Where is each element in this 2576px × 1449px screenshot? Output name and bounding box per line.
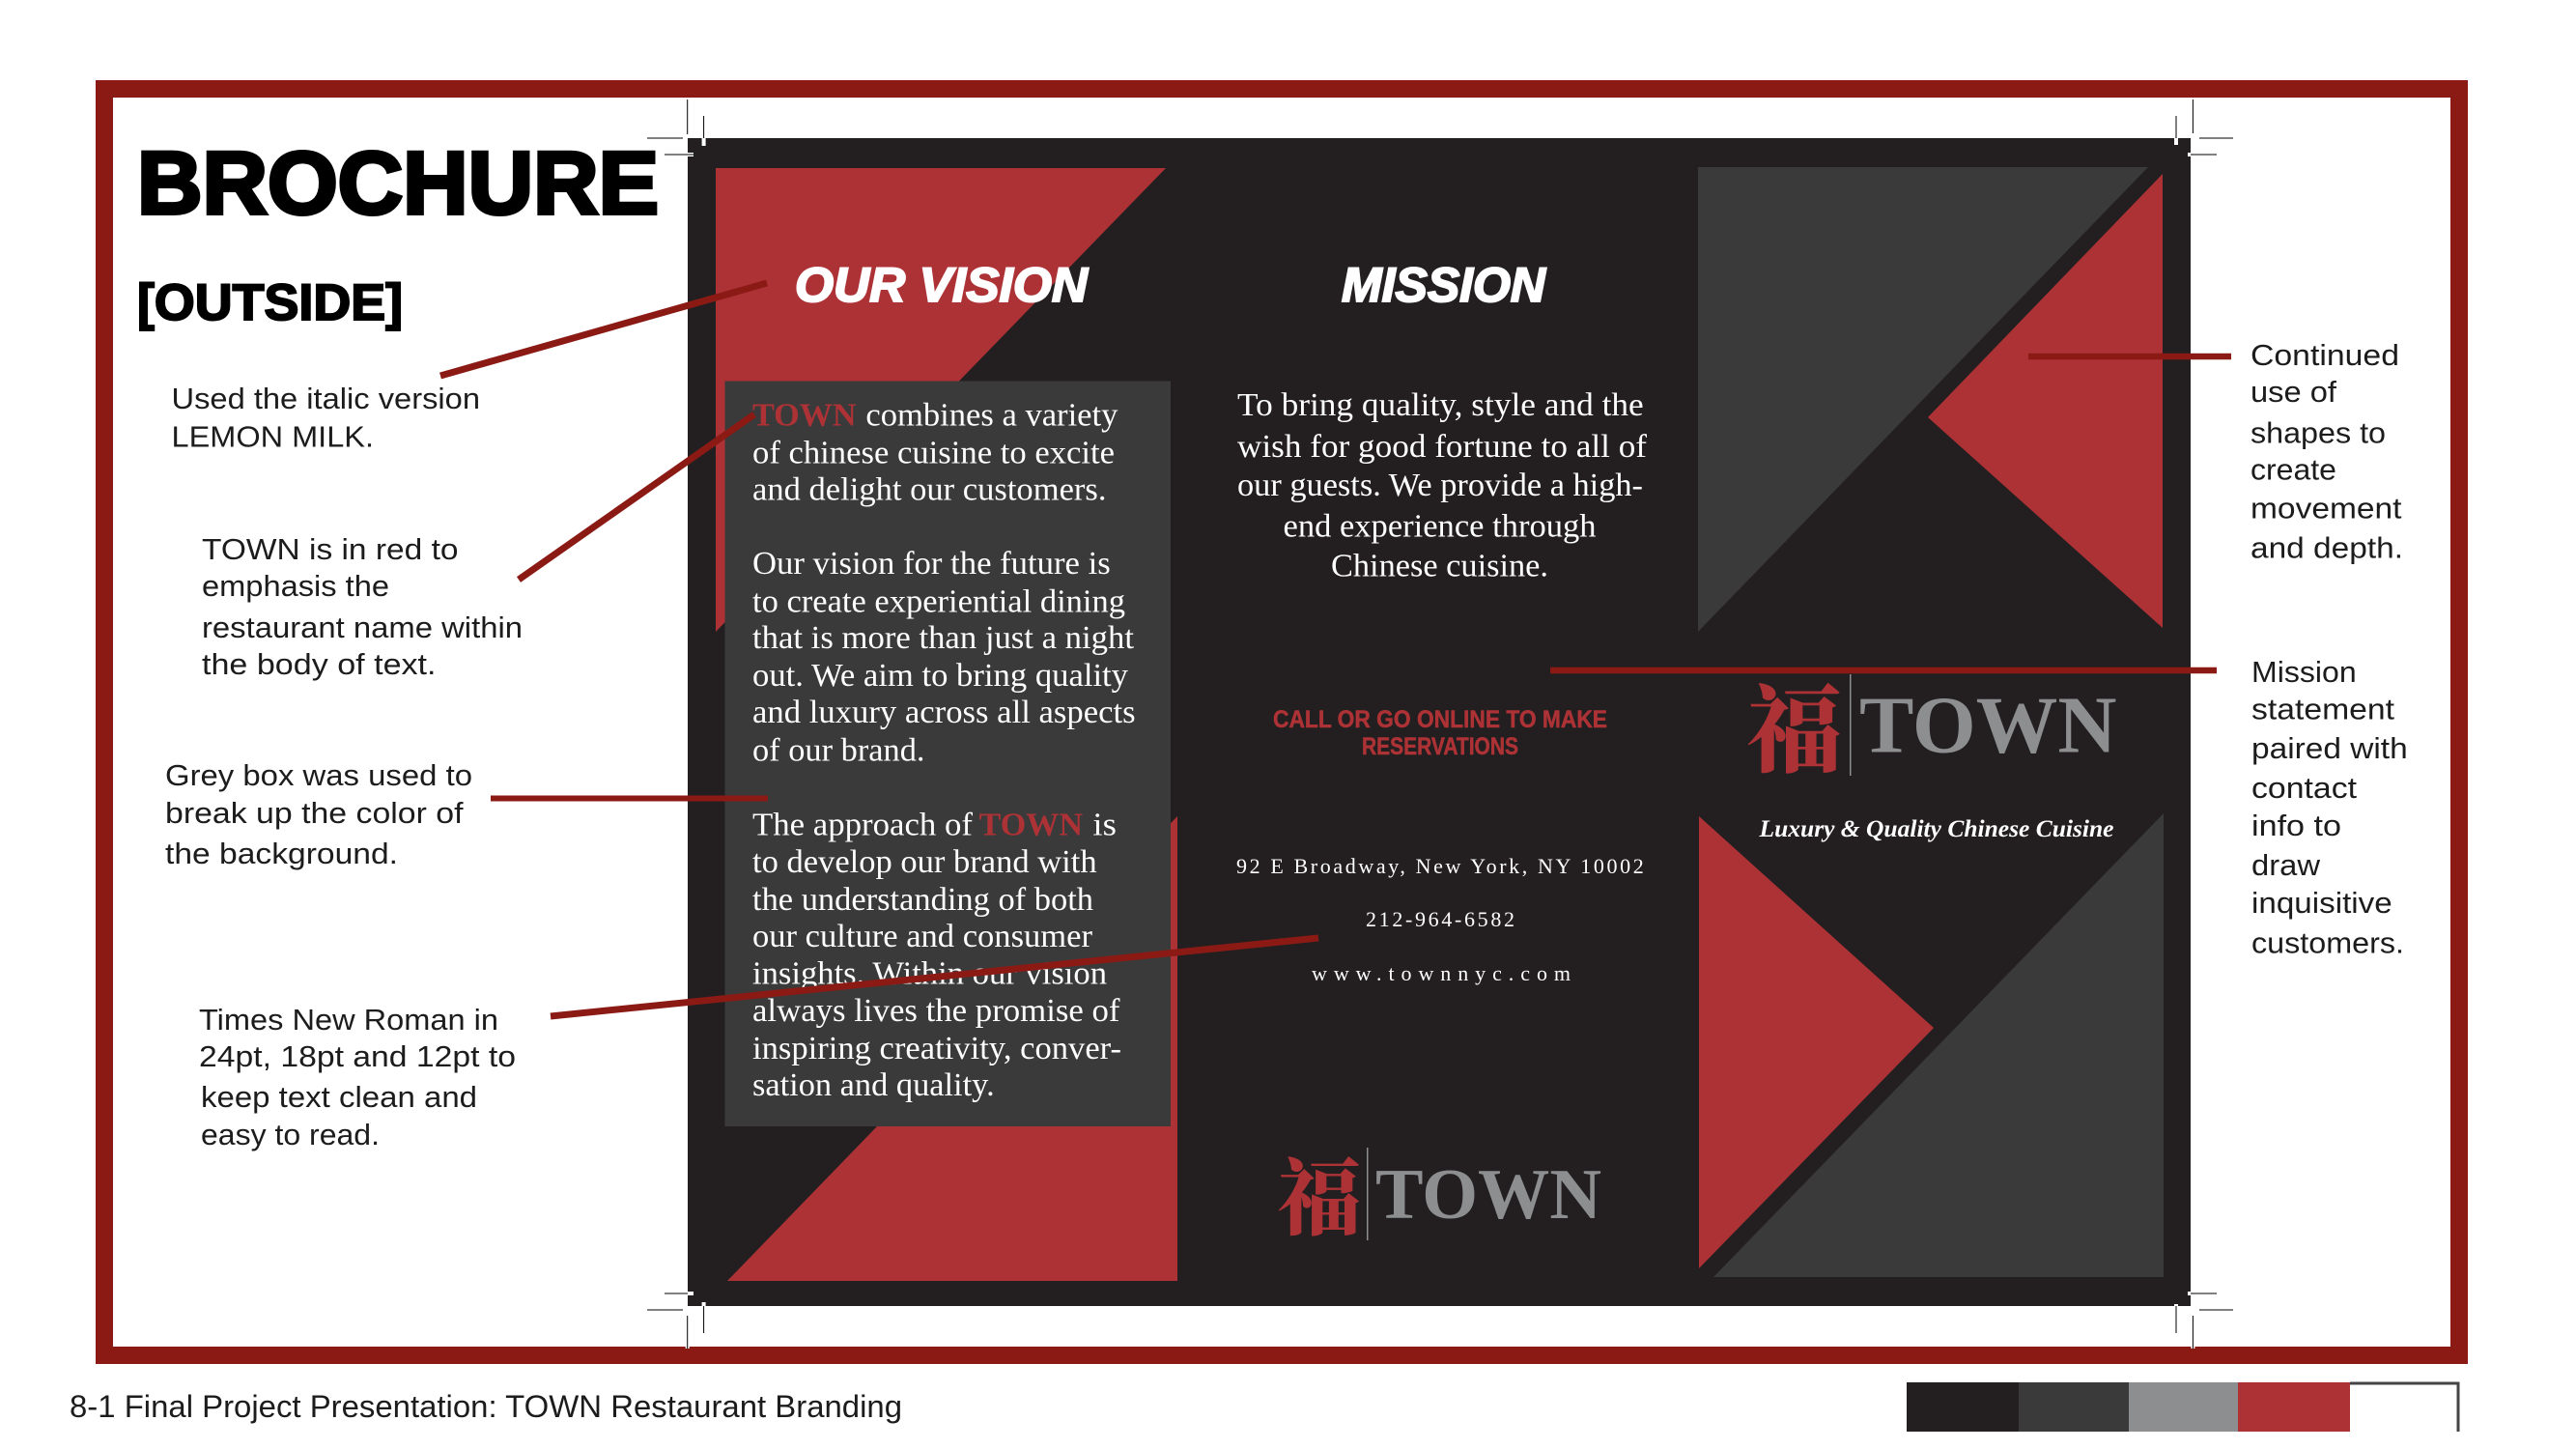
annotation: grey box: Grey box was used to (165, 758, 472, 792)
mission body text (1237, 387, 1648, 583)
annotation: mission (2251, 655, 2408, 960)
vision body text: TOWN (979, 808, 1083, 843)
annotation: TOWN in red: emphasis the (202, 569, 389, 603)
vision body text: insights. Within our vision (752, 956, 1107, 992)
brochure background (688, 138, 2191, 1306)
annotation: mission: paired with (2251, 731, 2408, 765)
annotation: shapes: use of (2250, 375, 2336, 409)
vision body text: and luxury across all aspects (752, 695, 1136, 730)
annotation: mission: draw (2251, 848, 2321, 882)
callout line: mission (1550, 668, 2217, 673)
annotation: shapes (2250, 338, 2403, 565)
logo: cover: 福 (1747, 681, 1842, 785)
vision body text: that is more than just a night (752, 620, 1135, 656)
annotation: typeface (199, 1003, 516, 1151)
annotation: mission: customers. (2251, 926, 2404, 960)
subtitle: [OUTSIDE] (137, 274, 403, 331)
annotation: italic font: LEMON MILK. (172, 419, 374, 454)
footer: 8-1 Final Project Presentation: TOWN Restaurant Branding (70, 1389, 902, 1424)
annotation: TOWN in red: restaurant name within (202, 611, 523, 644)
panel: cover top shapes (1698, 167, 2163, 632)
callout line: grey box (491, 796, 768, 802)
vision body text: out. We aim to bring quality (752, 658, 1128, 694)
callout line: TOWN in red (519, 414, 754, 580)
vision body text: to develop our brand with (752, 844, 1097, 880)
annotation: shapes: movement (2250, 492, 2402, 526)
mission body text: end experience through (1283, 508, 1596, 544)
vision body text: combines a variety (865, 398, 1118, 434)
logo: middle panel: TOWN (1375, 1155, 1601, 1235)
annotation: TOWN in red: TOWN is in red to (202, 532, 458, 566)
annotation: italic font (172, 382, 480, 454)
heading: mission: MISSION (1342, 258, 1546, 312)
vision body text: is (1092, 808, 1117, 843)
heading: our vision: OUR VISION (795, 258, 1089, 312)
logo: middle panel: 福 (1278, 1153, 1361, 1246)
vision body text (752, 398, 1136, 1103)
annotation: grey box (165, 758, 472, 870)
vision body text: sation and quality. (752, 1067, 995, 1103)
callout line: shapes (2028, 354, 2231, 359)
mission body text: our guests. We provide a high- (1237, 468, 1643, 503)
vision body text: of chinese cuisine to excite (752, 435, 1115, 471)
cover tagline: Luxury & Quality Chinese Cuisine (1758, 816, 2113, 842)
vision body text: of our brand. (752, 732, 925, 769)
mission body text: To bring quality, style and the (1237, 387, 1644, 423)
annotation: shapes: Continued (2250, 338, 2399, 372)
annotation: italic font: Used the italic version (172, 382, 480, 415)
annotation: grey box: break up the color of (165, 796, 464, 830)
annotation: mission: contact (2251, 771, 2357, 805)
colour palette (1907, 1382, 2458, 1432)
logo: cover: TOWN (1859, 681, 2117, 771)
vision body text: to create experiential dining (752, 583, 1125, 620)
annotation: shapes: shapes to (2250, 415, 2386, 450)
annotation: typeface: Times New Roman in (199, 1003, 498, 1037)
annotation: typeface: keep text clean and (201, 1080, 477, 1114)
vision body text: The approach of (752, 808, 974, 843)
crop marks (647, 99, 2233, 1349)
annotation: typeface: 24pt, 18pt and 12pt to (199, 1039, 516, 1073)
annotation: TOWN in red (202, 532, 523, 681)
annotation: grey box: the background. (165, 837, 398, 870)
callout line: italic font (440, 283, 767, 376)
annotation: mission: Mission (2251, 655, 2357, 689)
vision body text: and delight our customers. (752, 471, 1107, 507)
contact details: www.townnyc.com (1312, 961, 1571, 985)
title: BROCHURE (137, 134, 659, 233)
vision body text: inspiring creativity, conver- (752, 1031, 1121, 1066)
logo: middle panel (1278, 1148, 1601, 1246)
contact details (1236, 854, 1644, 985)
annotation: shapes: and depth. (2250, 531, 2403, 565)
logo: cover (1747, 674, 2117, 785)
vision body text: the understanding of both (752, 882, 1093, 918)
annotation: shapes: create (2250, 452, 2336, 487)
mission body text: Chinese cuisine. (1331, 548, 1548, 583)
callout line: typeface (551, 938, 1318, 1016)
call to action: RESERVATIONS (1362, 733, 1518, 760)
annotation: mission: info to (2251, 809, 2341, 842)
panel: cover bottom shapes (1699, 813, 2164, 1277)
annotation: mission: statement (2251, 693, 2394, 726)
vision body text: Our vision for the future is (752, 546, 1111, 582)
annotation: TOWN in red: the body of text. (202, 647, 437, 681)
contact details: 212-964-6582 (1366, 907, 1514, 931)
mission body text: wish for good fortune to all of (1237, 429, 1648, 465)
annotation: mission: inquisitive (2251, 886, 2392, 920)
contact details: 92 E Broadway, New York, NY 10002 (1236, 854, 1644, 878)
panel: grey text box (724, 381, 1171, 1126)
panel: left shapes (716, 168, 1177, 1281)
vision body text: our culture and consumer (752, 919, 1093, 954)
vision body text: TOWN (752, 398, 857, 434)
call to action (1273, 706, 1607, 760)
call to action: CALL OR GO ONLINE TO MAKE (1273, 706, 1607, 733)
vision body text: always lives the promise of (752, 993, 1120, 1029)
annotation: typeface: easy to read. (201, 1118, 380, 1151)
